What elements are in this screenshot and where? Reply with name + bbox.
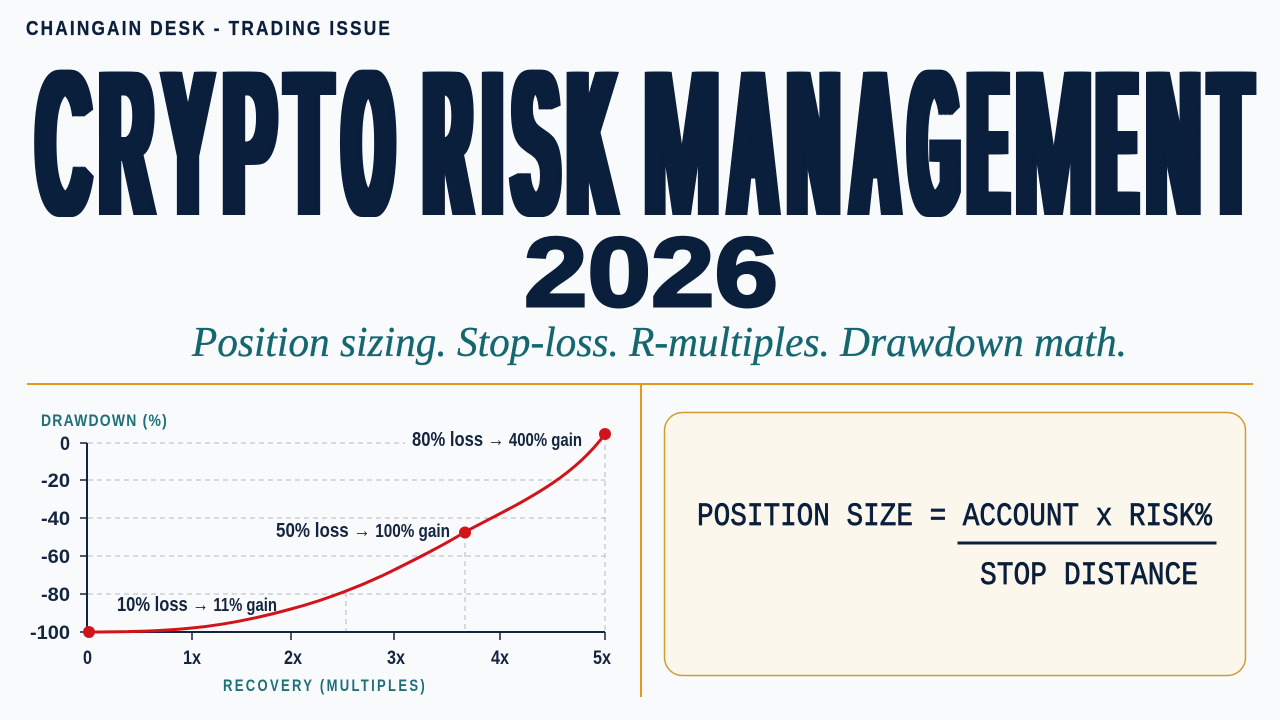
- x axis tick labels: 3x: [387, 648, 405, 669]
- title: [34, 28, 1256, 260]
- y axis tick labels: -60: [41, 547, 70, 568]
- x axis tick labels: 2x: [284, 648, 302, 669]
- callout: 50% loss: 50% loss → 100% gain: [276, 520, 450, 542]
- eyebrow label: CHAINGAIN DESK - TRADING ISSUE: [26, 18, 392, 40]
- title: N: [1147, 28, 1199, 260]
- title: Y: [164, 28, 212, 260]
- panel: drawdown recovery chart: [30, 411, 611, 695]
- grid lines: [88, 436, 605, 631]
- title: M: [1014, 28, 1093, 260]
- title: K: [569, 28, 614, 260]
- x axis title: RECOVERY (MULTIPLES): [223, 676, 427, 695]
- title: G: [910, 28, 958, 260]
- title: I: [481, 28, 504, 260]
- formula left side and numerator: POSITION SIZE = ACCOUNT x RISK%: [697, 498, 1213, 535]
- y axis tick labels: 0: [60, 434, 70, 455]
- y axis tick labels: -100: [30, 623, 70, 644]
- title: S: [512, 28, 558, 260]
- fraction bar: [958, 542, 1216, 544]
- section divider rules: [27, 384, 1253, 697]
- callout: 80% loss: 80% loss → 400% gain: [412, 429, 582, 451]
- panel: position size formula: [664, 412, 1246, 676]
- x axis tick labels: [83, 648, 611, 669]
- title: T: [1211, 28, 1251, 260]
- title: O: [344, 28, 393, 260]
- title: P: [223, 28, 275, 260]
- y axis tick labels: -20: [41, 471, 70, 492]
- callout: 10% loss: 10% loss → 11% gain: [117, 594, 277, 616]
- x axis tick labels: 4x: [491, 648, 509, 669]
- title: R: [100, 28, 152, 260]
- title: N: [788, 28, 839, 260]
- y axis tick labels: -40: [41, 509, 70, 530]
- x axis tick labels: 5x: [593, 648, 611, 669]
- title: E: [970, 28, 1006, 260]
- data points: [83, 428, 611, 638]
- title: R: [425, 28, 471, 260]
- year heading: 2026: [524, 217, 778, 327]
- recovery curve: [89, 434, 605, 632]
- title: T: [286, 28, 330, 260]
- y axis tick labels: -80: [41, 585, 70, 606]
- y axis tick labels: [30, 434, 70, 644]
- axes: [80, 443, 605, 640]
- x axis tick labels: 1x: [183, 648, 201, 669]
- subtitle: Position sizing. Stop-loss. R-multiples. Drawdown math.: [191, 320, 1127, 366]
- formula denominator: STOP DISTANCE: [980, 557, 1198, 594]
- title: A: [852, 28, 898, 260]
- title: A: [730, 28, 776, 260]
- title: M: [643, 28, 720, 260]
- x axis tick labels: 0: [83, 648, 92, 669]
- y axis title: DRAWDOWN (%): [41, 411, 168, 430]
- formula card: [664, 412, 1246, 676]
- title: E: [1099, 28, 1135, 260]
- title: C: [37, 28, 90, 260]
